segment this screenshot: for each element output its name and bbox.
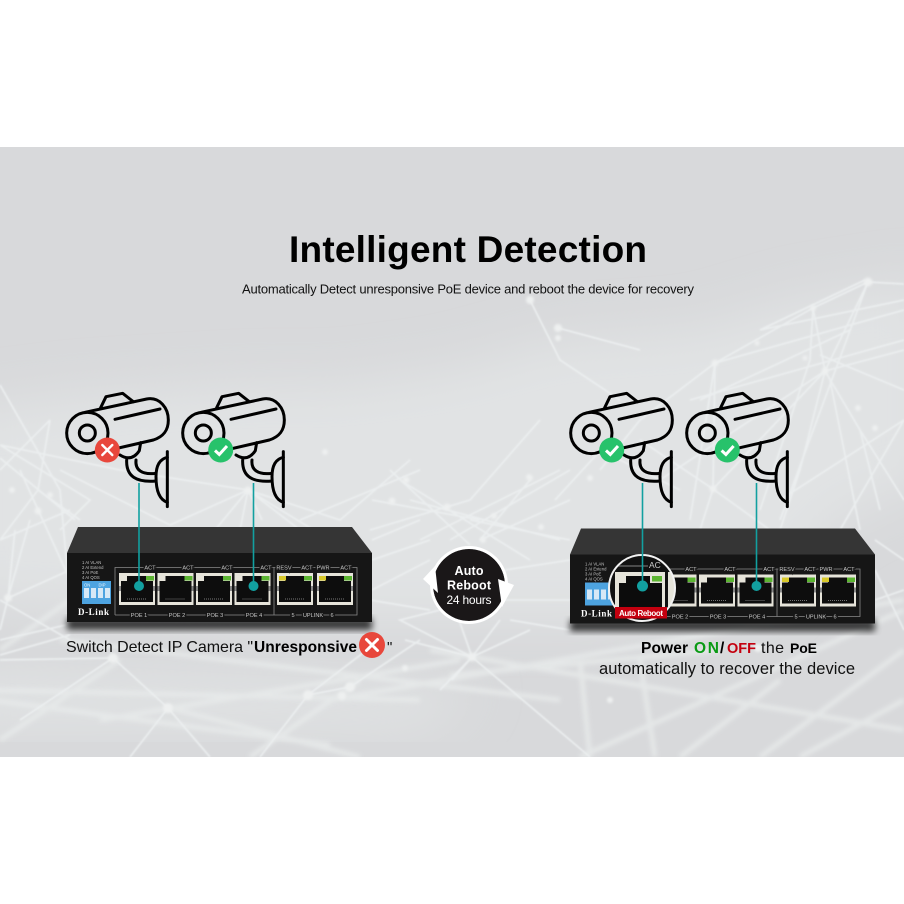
network switch: right: 4 AI QOS [585, 576, 603, 582]
icon: green check badge [715, 438, 740, 462]
auto reboot badge: Reboot [447, 578, 492, 592]
right scenario panel [570, 393, 875, 678]
network switch: right: ACT [843, 567, 855, 573]
connection: camera 4 to port 4 [752, 483, 762, 591]
network switch: right: ACT [804, 567, 816, 573]
network switch: left: RESV [276, 566, 292, 572]
network switch: left: POE 2 [169, 613, 185, 619]
background panel [0, 147, 904, 757]
caption: left: Unresponsive [254, 639, 357, 656]
connection: camera 1 to port 1 [134, 483, 144, 591]
label: auto reboot: Auto Reboot [619, 609, 663, 618]
network switch: left [67, 527, 372, 630]
network switch: left: 4 AI QOS [82, 575, 100, 580]
network switch: left: D-Link [78, 607, 109, 617]
icon: red cross inline [359, 632, 385, 658]
network switch: left: ON [84, 582, 90, 588]
network switch: left: 6 [330, 613, 334, 619]
network switch: left: ACT [260, 566, 272, 572]
network switch: right: 5 [794, 614, 798, 620]
caption: right: automatically to recover the device [599, 660, 855, 678]
icon: green check badge [208, 438, 233, 462]
caption: right: PoE [790, 640, 817, 656]
auto reboot badge: 24 hours [446, 593, 492, 607]
caption: left [66, 632, 392, 658]
caption: right: Power [641, 640, 688, 657]
network switch: right: RESV [779, 567, 795, 573]
connection: camera 3 to port 1 [637, 483, 648, 592]
network switch: right [570, 528, 875, 632]
caption: right: / [720, 640, 725, 657]
network switch: right: 1 AI VLAN [585, 562, 604, 566]
network switch: right: 2 AI Extend [585, 566, 607, 572]
network switch: left: 1 AI VLAN [82, 560, 101, 565]
network switch: right: D-Link [581, 608, 612, 618]
caption: right: ON [694, 640, 719, 657]
magnifier: enlarged PoE port [609, 555, 676, 621]
auto reboot badge: Auto [454, 564, 484, 578]
network switch: left: ACT [182, 566, 194, 572]
network switch: left: PWR [316, 566, 330, 572]
network switch: left: ACT [144, 566, 156, 572]
camera: unresponsive [67, 393, 168, 507]
subtitle: Automatically Detect unresponsive PoE device and reboot the device for recovery [242, 282, 694, 296]
network switch: right: ACT [763, 567, 775, 573]
caption: right: OFF [727, 641, 756, 657]
network switch: right: POE 3 [710, 614, 726, 620]
network switch: left: POE 1 [131, 613, 147, 619]
auto reboot badge [423, 548, 514, 622]
connection: camera 2 to port 4 [248, 483, 258, 591]
network switch: left: ACT [340, 566, 352, 572]
network switch: right: PWR [819, 567, 833, 573]
network switch: right: POE 2 [672, 614, 688, 620]
network switch: right: UPLINK [806, 614, 826, 620]
caption: right [599, 640, 855, 678]
icon: green check badge [599, 438, 624, 462]
network switch: left: DIP [99, 582, 106, 588]
network switch: left: 3 AI PoE [82, 570, 99, 575]
network switch: left: UPLINK [303, 613, 323, 619]
magnifier: enlarged PoE port: AC [649, 560, 661, 570]
caption: left: " [387, 639, 392, 656]
network switch: left: 5 [291, 613, 295, 619]
network switch: right: POE 4 [749, 614, 765, 620]
network switch: left: POE 4 [246, 613, 262, 619]
caption: left: Switch Detect IP Camera " [66, 639, 253, 656]
label: auto reboot [615, 607, 667, 618]
camera: recovered 1 [571, 393, 672, 507]
network switch: right: 6 [833, 614, 837, 620]
network switch: right: ACT [724, 567, 736, 573]
caption: right: the [761, 640, 784, 657]
network switch: left: 2 AI Extend [82, 565, 104, 570]
camera: recovered 2 [687, 393, 788, 507]
title: Intelligent Detection [289, 229, 647, 270]
network switch: left: ACT [221, 566, 233, 572]
network switch: right: 3 AI PoE [585, 572, 602, 576]
icon: red cross badge [95, 438, 120, 462]
network switch: right: ACT [685, 567, 697, 573]
camera: responsive [183, 393, 284, 507]
network switch: left: ACT [301, 566, 313, 572]
network switch: left: POE 3 [207, 613, 223, 619]
left scenario panel [66, 393, 392, 658]
